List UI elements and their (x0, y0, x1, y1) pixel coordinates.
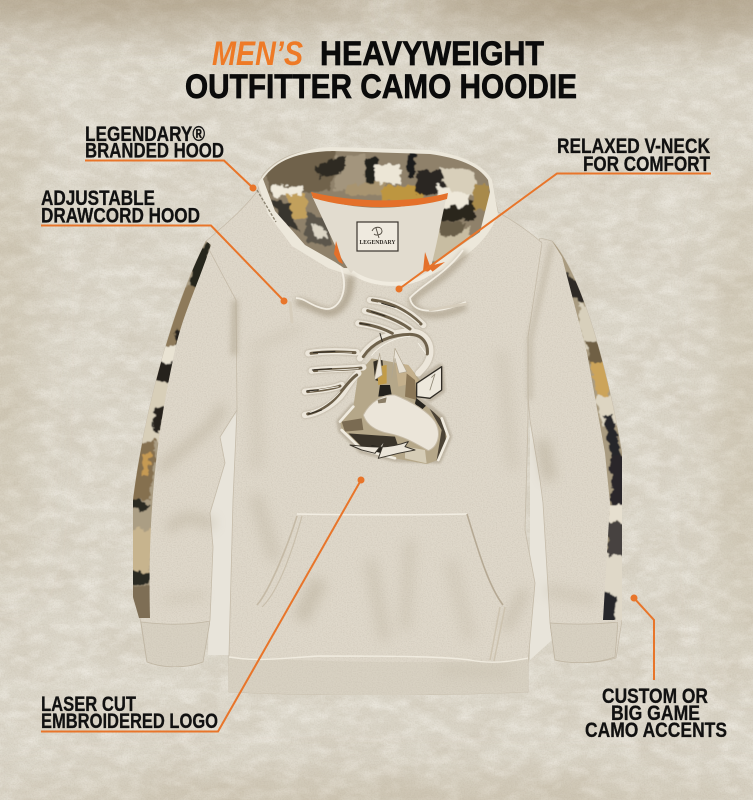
logo ear (417, 367, 442, 398)
hoodie illustration (120, 145, 630, 695)
leader line (85, 160, 253, 188)
logo antler left tines core (308, 352, 361, 414)
logo camo trim (340, 407, 448, 460)
logo lower jaw (350, 440, 415, 458)
title line 2: OUTFITTER CAMO HOODIE (185, 68, 577, 106)
waistband (229, 657, 528, 695)
light gaps between sleeves and body (208, 415, 552, 660)
callout: relaxed v-neck (396, 135, 711, 292)
leader line (634, 598, 654, 680)
leader line (41, 226, 284, 301)
callout text line 2: EMBROIDERED LOGO (41, 710, 218, 733)
sleeve cuffs (141, 621, 618, 667)
hood camo lining (263, 151, 490, 268)
callout text line 3: CAMO ACCENTS (585, 719, 727, 742)
leader line (41, 480, 361, 732)
right sleeve (520, 238, 622, 663)
callout text line 2: FOR COMFORT (583, 153, 710, 176)
logo shadow (305, 300, 448, 460)
right hood fold (410, 250, 466, 315)
callout text line 2: BIG GAME (611, 702, 700, 725)
left camo sleeve stripe (133, 241, 211, 618)
left hood fold (296, 266, 350, 312)
neck woven label (357, 222, 398, 251)
logo deer muzzle (363, 395, 438, 451)
embroidered deer logo (305, 300, 452, 467)
callout: legendary branded hood (85, 123, 256, 192)
waist seam (229, 656, 528, 662)
callout text: LASER CUT (41, 693, 136, 716)
leader dot (280, 298, 288, 304)
hoodie body (205, 148, 542, 695)
title accent: men's: MEN’S (212, 35, 303, 73)
leader dot (396, 286, 402, 292)
callout text: CUSTOM OR (602, 685, 708, 708)
right camo sleeve stripe (552, 242, 622, 620)
logo antler dark accents (307, 303, 395, 414)
orange neck trim (311, 192, 448, 272)
callout: adjustable drawcord hood (41, 187, 288, 304)
leader dot (630, 594, 638, 602)
callout: custom or big game camo accents (585, 594, 727, 742)
callout text: ADJUSTABLE (41, 187, 155, 210)
left sleeve (133, 241, 242, 666)
callout: laser cut embroidered logo (41, 476, 364, 733)
leader dot (250, 184, 256, 192)
leader line (399, 174, 711, 289)
kangaroo pocket (257, 514, 505, 661)
logo antler highlights (310, 303, 426, 413)
logo white inner tines (374, 348, 407, 380)
drawcords (290, 303, 466, 322)
callout text: RELAXED V-NECK (557, 135, 710, 158)
title line 1: HEAVYWEIGHT (320, 35, 544, 73)
label text: LEGENDARY (360, 240, 396, 246)
callout text line 2: DRAWCORD HOOD (41, 204, 200, 228)
leader dot (358, 476, 364, 484)
callout text line 2: BRANDED HOOD (85, 140, 224, 162)
title (185, 35, 577, 106)
hood branding print (257, 190, 276, 222)
hood white trim (258, 147, 498, 286)
fabric fold shading (160, 243, 595, 672)
neck collar rim (352, 271, 432, 284)
label mark (372, 227, 382, 238)
logo antler outline (305, 300, 430, 415)
inner neck panel (312, 194, 447, 283)
logo camo body (340, 358, 447, 464)
logo ear inner line (430, 374, 435, 390)
logo deer eye (378, 397, 387, 403)
callout text: LEGENDARY® (85, 123, 205, 146)
logo antler camo core (360, 300, 427, 357)
